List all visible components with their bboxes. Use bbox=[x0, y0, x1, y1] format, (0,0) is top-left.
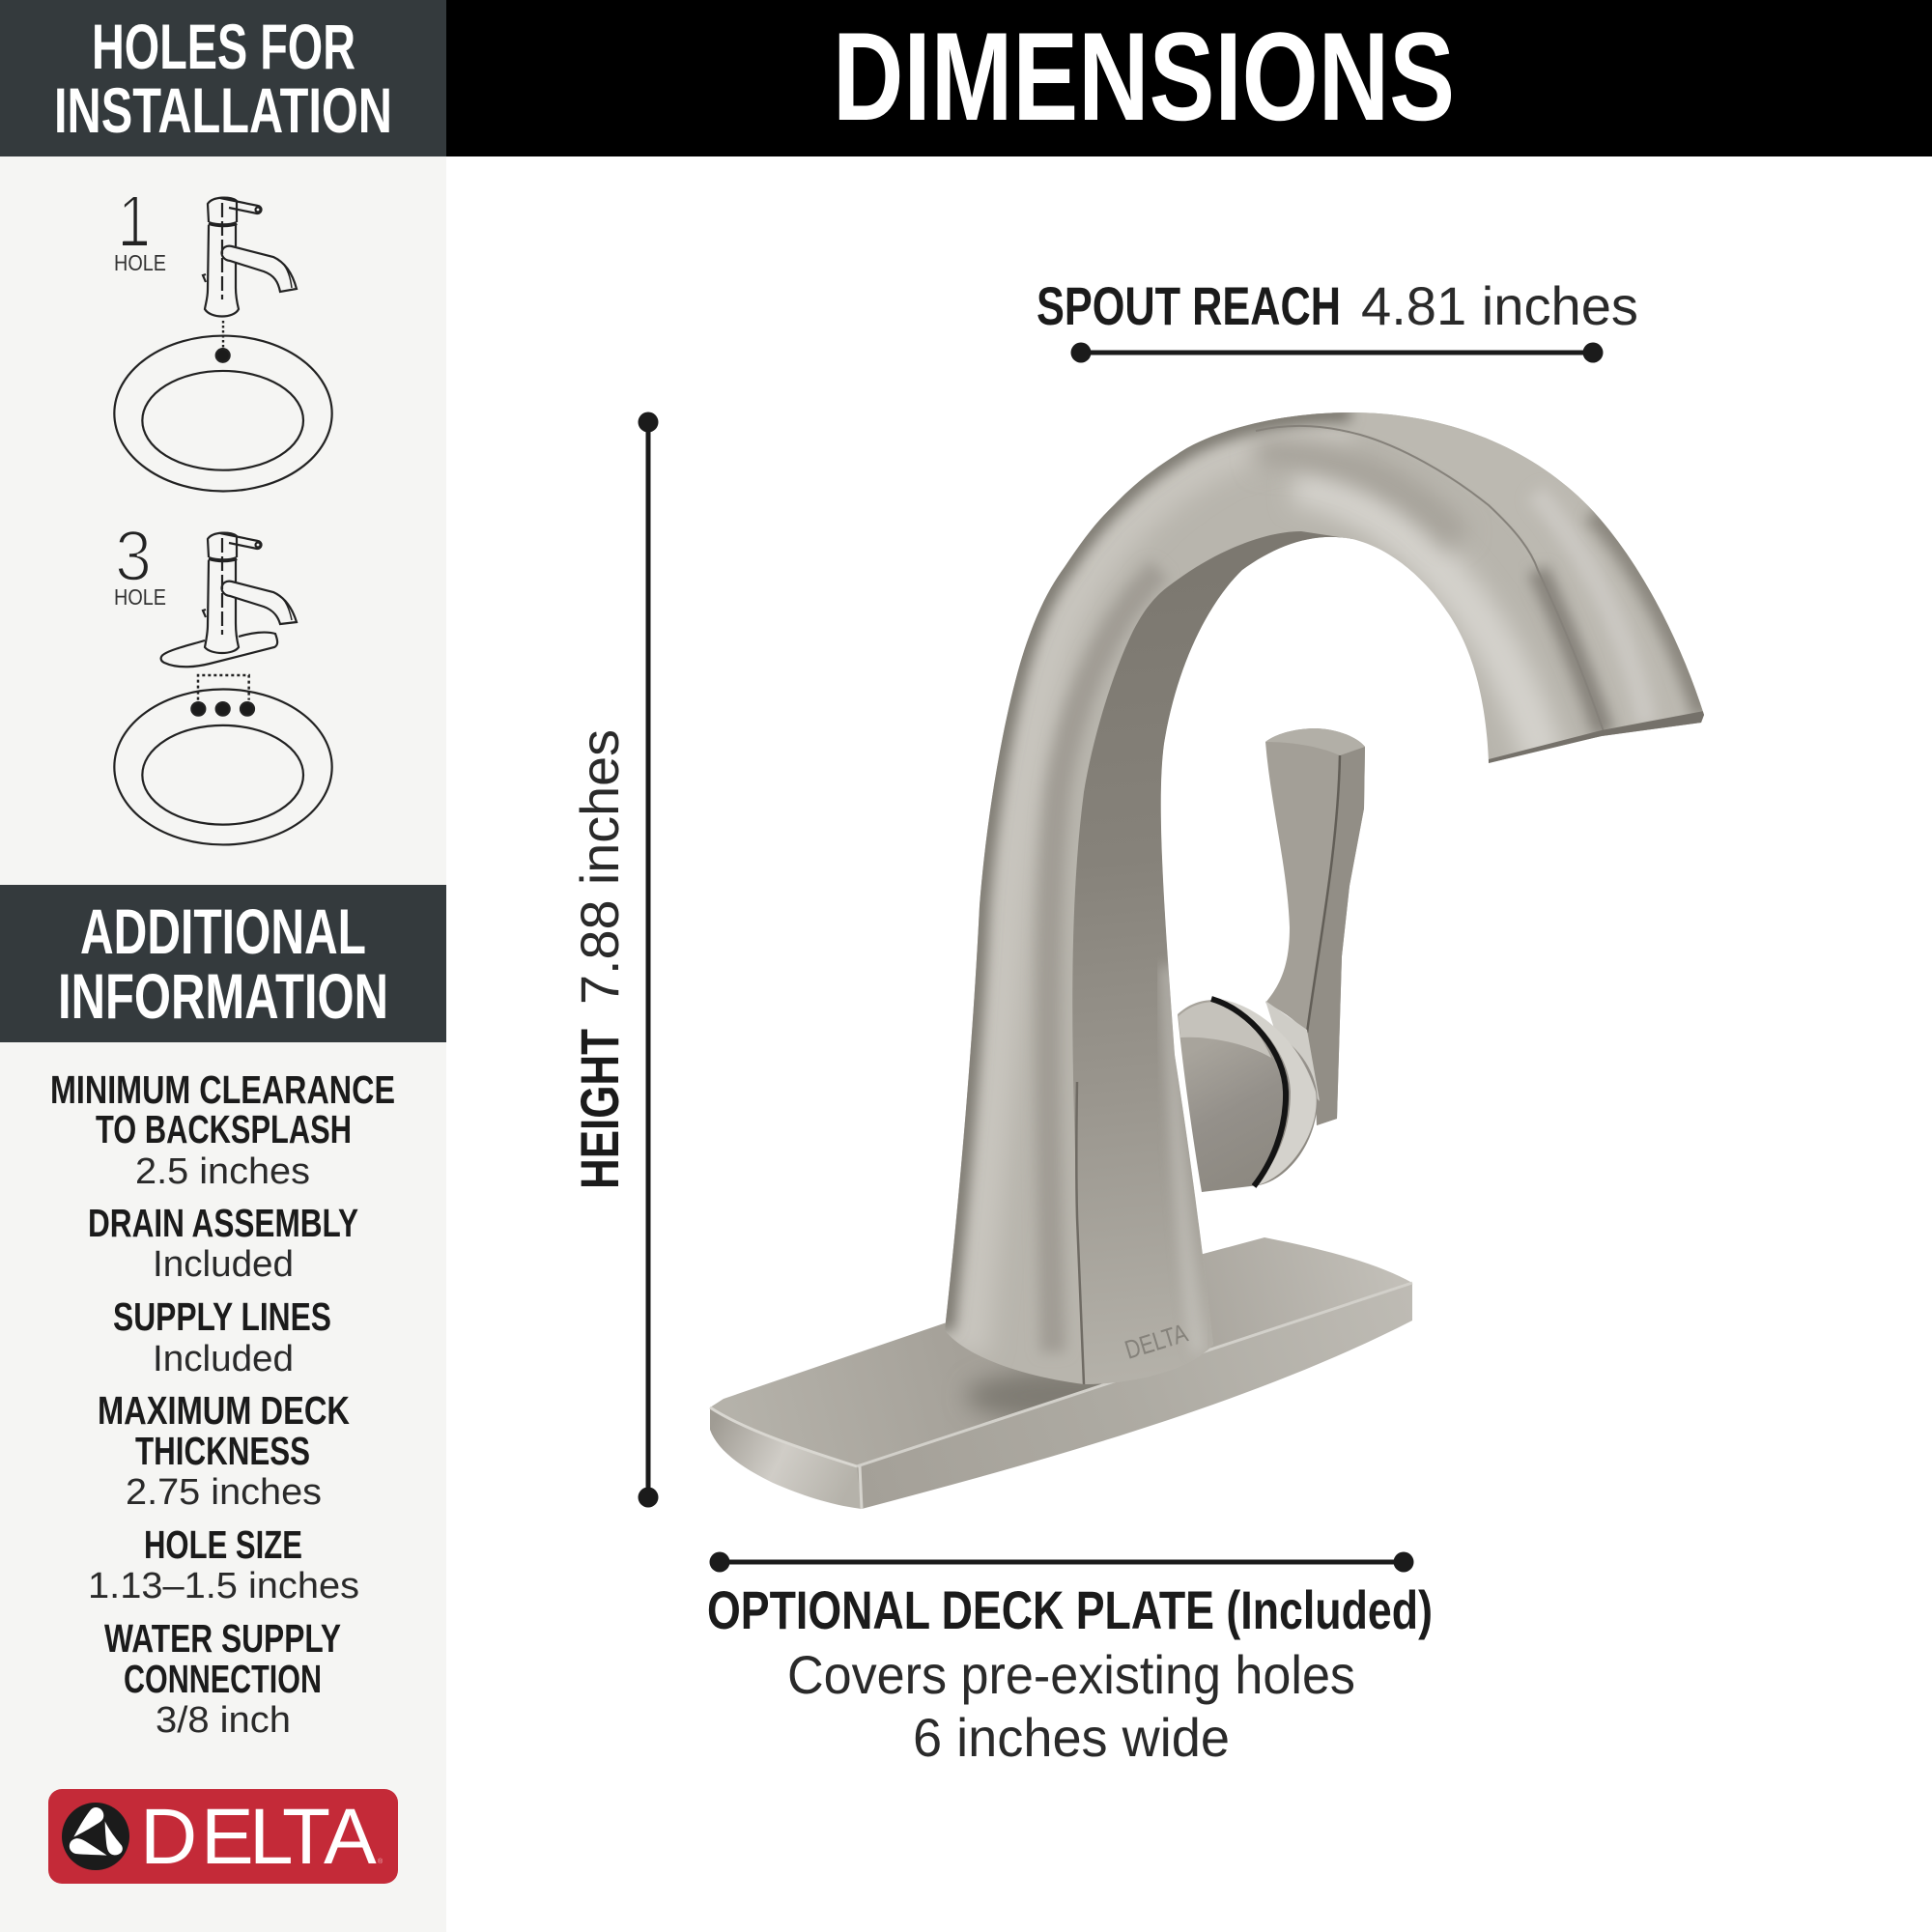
logo: delta: DELTA bbox=[140, 1793, 377, 1881]
heading banner: holes for installation bbox=[0, 0, 446, 156]
deck plate bbox=[710, 1237, 1412, 1509]
hub and handle bbox=[1178, 728, 1365, 1192]
heading banner: additional information: ADDITIONAL bbox=[80, 895, 366, 967]
text block: hole size bbox=[88, 1522, 359, 1606]
faucet body and spout bbox=[945, 412, 1704, 1384]
text block: minimum clearance bbox=[50, 1067, 395, 1192]
text block: hole size: 1.13–1.5 inches bbox=[88, 1566, 359, 1606]
text block: water supply connection: 3/8 inch bbox=[156, 1700, 291, 1741]
text block: maximum deck thickness: THICKNESS bbox=[135, 1429, 310, 1473]
dimension: optional deck plate: OPTIONAL DECK PLATE (Included) bbox=[707, 1579, 1433, 1640]
dimension: optional deck plate: 6 inches wide bbox=[913, 1707, 1230, 1768]
heading banner: dimensions: DIMENSIONS bbox=[833, 6, 1455, 147]
heading banner: dimensions bbox=[446, 0, 1932, 156]
text block: drain assembly bbox=[88, 1201, 358, 1285]
heading banner: holes for installation: INSTALLATION bbox=[54, 74, 392, 146]
text block: maximum deck thickness: MAXIMUM DECK bbox=[98, 1388, 350, 1433]
faucet brand mark: DELTA bbox=[1122, 1319, 1191, 1365]
dimension: spout reach bbox=[1037, 275, 1638, 363]
text block: hole size: HOLE SIZE bbox=[144, 1522, 302, 1567]
text block: drain assembly: Included bbox=[153, 1244, 294, 1285]
text block: drain assembly: DRAIN ASSEMBLY bbox=[88, 1201, 358, 1245]
sidebar panel bbox=[0, 0, 446, 1932]
text block: water supply connection: CONNECTION bbox=[124, 1657, 322, 1701]
dimension: spout reach: 4.81 inches bbox=[1361, 275, 1638, 336]
heading banner: additional information bbox=[0, 885, 446, 1042]
icon: 1 hole installation bbox=[114, 181, 332, 491]
icon: 3 hole installation: HOLE bbox=[114, 584, 166, 610]
text block: supply lines: SUPPLY LINES bbox=[113, 1294, 331, 1339]
logo: delta: ® bbox=[378, 1858, 384, 1865]
text block: maximum deck thickness bbox=[98, 1388, 350, 1513]
dimension: optional deck plate bbox=[707, 1551, 1433, 1768]
text block: water supply connection: WATER SUPPLY bbox=[104, 1616, 341, 1661]
logo: delta bbox=[48, 1789, 398, 1884]
text block: maximum deck thickness: 2.75 inches bbox=[126, 1472, 322, 1513]
dimension: height: HEIGHT bbox=[569, 1029, 630, 1189]
text block: supply lines: Included bbox=[153, 1339, 294, 1379]
icon: 1 hole installation: HOLE bbox=[114, 250, 166, 275]
heading banner: holes for installation: HOLES FOR bbox=[92, 11, 355, 82]
dimension: height bbox=[569, 412, 659, 1507]
icon: 1 hole installation: 1 bbox=[118, 181, 151, 261]
icon: 3 hole installation: 3 bbox=[115, 516, 152, 596]
faucet illustration bbox=[710, 386, 1739, 1509]
icon: 3 hole installation bbox=[114, 516, 332, 844]
text block: minimum clearance: MINIMUM CLEARANCE bbox=[50, 1067, 395, 1112]
text block: minimum clearance: 2.5 inches bbox=[135, 1151, 310, 1192]
text block: water supply connection bbox=[104, 1616, 341, 1741]
dimension: spout reach: SPOUT REACH bbox=[1037, 275, 1341, 336]
dimension: height: 7.88 inches bbox=[569, 729, 630, 1005]
text block: supply lines bbox=[113, 1294, 331, 1379]
dimension: optional deck plate: Covers pre-existing holes bbox=[787, 1644, 1355, 1705]
heading banner: additional information: INFORMATION bbox=[58, 960, 388, 1032]
text block: minimum clearance: TO BACKSPLASH bbox=[96, 1107, 352, 1151]
